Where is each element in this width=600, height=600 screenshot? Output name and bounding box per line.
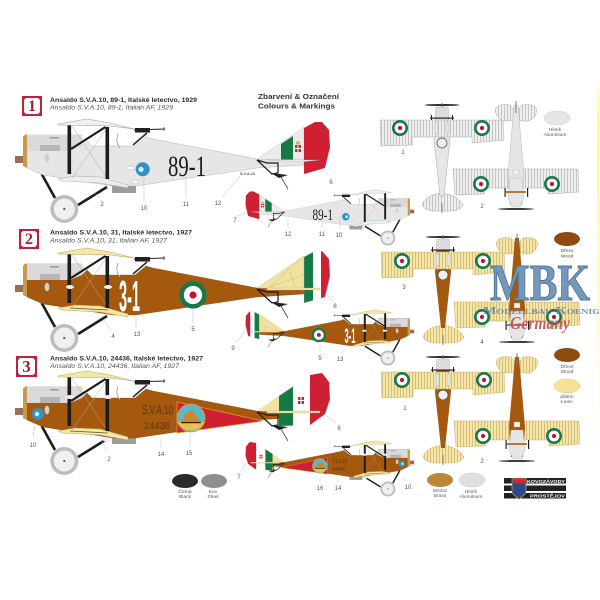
swatches black and steel: Černá — [178, 488, 192, 495]
title: scheme 1: Ansaldo S.V.A.10, 89-1, Italian AF, 1929 — [49, 105, 173, 112]
mini serial: 24436 — [332, 467, 345, 473]
callouts scheme 1: 11 — [319, 232, 326, 238]
callouts scheme 1: 10 — [141, 206, 148, 212]
callouts scheme 2: 13 — [134, 332, 141, 338]
swatches black and steel: Steel — [207, 494, 219, 500]
swatch wood: Wood — [561, 254, 574, 260]
top view 4 — [454, 234, 580, 343]
top views scheme 2 — [381, 234, 580, 346]
swatches wood and linen: Linen — [561, 399, 573, 405]
callouts scheme 3: 16 — [317, 486, 324, 492]
swatch aluminium — [544, 111, 570, 138]
callouts scheme 2: 13 — [337, 357, 344, 363]
aircraft 2 mini side view: 3-1 — [344, 325, 356, 348]
logo Kovozávody Prostějov: PROSTĚJOV — [530, 491, 566, 498]
title: scheme 3: Ansaldo S.V.A.10, 24436, Italian AF, 1927 — [49, 363, 179, 370]
mini code: 89-1 — [312, 207, 333, 224]
callouts scheme 1: 11 — [183, 202, 190, 208]
callouts scheme 2: 9 — [231, 346, 235, 352]
title: scheme 3: Ansaldo S.V.A.10, 24436, Italské letectvo, 1927 — [50, 355, 203, 362]
top view 1 — [380, 104, 504, 213]
aircraft 2 mini side view — [245, 309, 414, 366]
swatch aluminium: Hliník — [549, 127, 562, 133]
badge 1 — [22, 96, 42, 116]
callouts scheme 3: 14 — [335, 486, 342, 492]
top view 3 — [381, 236, 505, 345]
title: scheme 2: Ansaldo S.V.A.10, 31, Italské letectvo, 1927 — [50, 230, 192, 237]
aircraft 3 mini side view — [244, 440, 414, 497]
swatches black and steel — [172, 474, 227, 500]
heading: colours and markings: Zbarvení & Označení — [258, 92, 340, 101]
top views scheme 3 — [381, 353, 580, 465]
watermark Germany: Germany — [510, 313, 571, 333]
callouts scheme 2: 4 — [111, 334, 115, 340]
callouts scheme 1: 10 — [336, 233, 343, 239]
callouts scheme 1: 2 — [100, 202, 104, 208]
top views scheme 1 — [380, 101, 579, 213]
swatch wood: Dřevo — [560, 248, 574, 254]
aircraft 2 side view: 3-1 — [119, 272, 140, 321]
code 24436: 24436 — [144, 421, 170, 432]
callouts scheme 3 — [30, 416, 412, 492]
code 89-1: 89-1 — [168, 150, 206, 183]
watermark MBK — [483, 255, 600, 333]
callouts scheme 3: 10 — [30, 443, 37, 449]
top views scheme 2: 4 — [480, 340, 484, 346]
top views scheme 1: 1 — [401, 150, 405, 156]
badge 3: 3 — [22, 357, 31, 376]
badge 3 — [16, 356, 37, 377]
swatches brass and aluminium — [427, 473, 485, 500]
callouts scheme 3: 10 — [405, 485, 412, 491]
swatches wood and linen: plátno — [560, 394, 574, 400]
callouts scheme 3: 6 — [337, 426, 341, 432]
heading: colours and markings — [258, 92, 340, 110]
callouts scheme 2: 8 — [333, 304, 337, 310]
callouts scheme 3: 14 — [158, 452, 165, 458]
swatches black and steel: Kov — [209, 489, 218, 495]
title: scheme 1 — [49, 97, 197, 112]
aircraft 1 side view — [15, 118, 334, 223]
callouts scheme 1 — [92, 168, 343, 239]
top view 2 lower — [454, 353, 580, 462]
watermark subtitle: Modellbau Koenig — [483, 306, 600, 317]
badge 1: 1 — [28, 98, 36, 115]
callouts scheme 1: 7 — [233, 218, 237, 224]
logo Kovozávody Prostějov: KOVOZÁVODY — [527, 478, 565, 484]
swatches brass and aluminium: Aluminium — [460, 494, 482, 500]
swatches wood and linen — [554, 348, 580, 405]
top views scheme 1: 2 — [480, 204, 484, 210]
badge 2 — [19, 229, 39, 249]
heading: colours and markings: Colours & Markings — [258, 101, 335, 110]
top views scheme 3: 1 — [403, 406, 407, 412]
callouts scheme 2: 5 — [318, 356, 322, 362]
badge 2: 2 — [25, 231, 33, 248]
top views scheme 3: 2 — [480, 459, 484, 465]
mini codes: S.V.A.10 — [332, 458, 347, 465]
title: scheme 3 — [49, 355, 203, 370]
swatches wood and linen: Wood — [561, 369, 574, 375]
logo Kovozávody Prostějov — [504, 478, 566, 500]
swatches brass and aluminium: Hliník — [465, 489, 478, 495]
aircraft 2 side view — [15, 247, 331, 352]
aircraft 3 side view — [15, 370, 332, 475]
swatches brass and aluminium: Mosaz — [433, 488, 448, 494]
callouts scheme 1: 12 — [285, 232, 292, 238]
swatch wood — [554, 232, 580, 260]
swatches wood and linen: Dřevo — [560, 364, 574, 370]
swatch aluminium: Aluminium — [544, 132, 566, 138]
serial: S.V.A.10 — [240, 171, 256, 176]
code S.V.A.10: S.V.A.10 — [142, 402, 173, 417]
callouts scheme 1: 6 — [329, 180, 333, 186]
top views scheme 2: 3 — [402, 285, 406, 291]
callouts scheme 1: 12 — [215, 201, 222, 207]
top view 2 — [453, 101, 579, 210]
callouts scheme 2 — [103, 295, 345, 363]
swatches brass and aluminium: Brass — [434, 493, 447, 499]
swatches black and steel: Black — [179, 494, 192, 500]
callouts scheme 3: 2 — [107, 457, 111, 463]
aircraft 1 mini side view — [243, 189, 414, 246]
top view 1 lower — [381, 356, 505, 465]
callouts scheme 2: 5 — [191, 327, 195, 333]
callouts scheme 3: 7 — [237, 475, 241, 481]
title: scheme 2: Ansaldo S.V.A.10, 31, Italian AF, 1927 — [49, 238, 167, 245]
callouts scheme 3: 15 — [186, 451, 193, 457]
title: scheme 1: Ansaldo S.V.A.10, 89-1, Italské letectvo, 1929 — [50, 97, 197, 104]
title: scheme 2 — [49, 230, 192, 245]
